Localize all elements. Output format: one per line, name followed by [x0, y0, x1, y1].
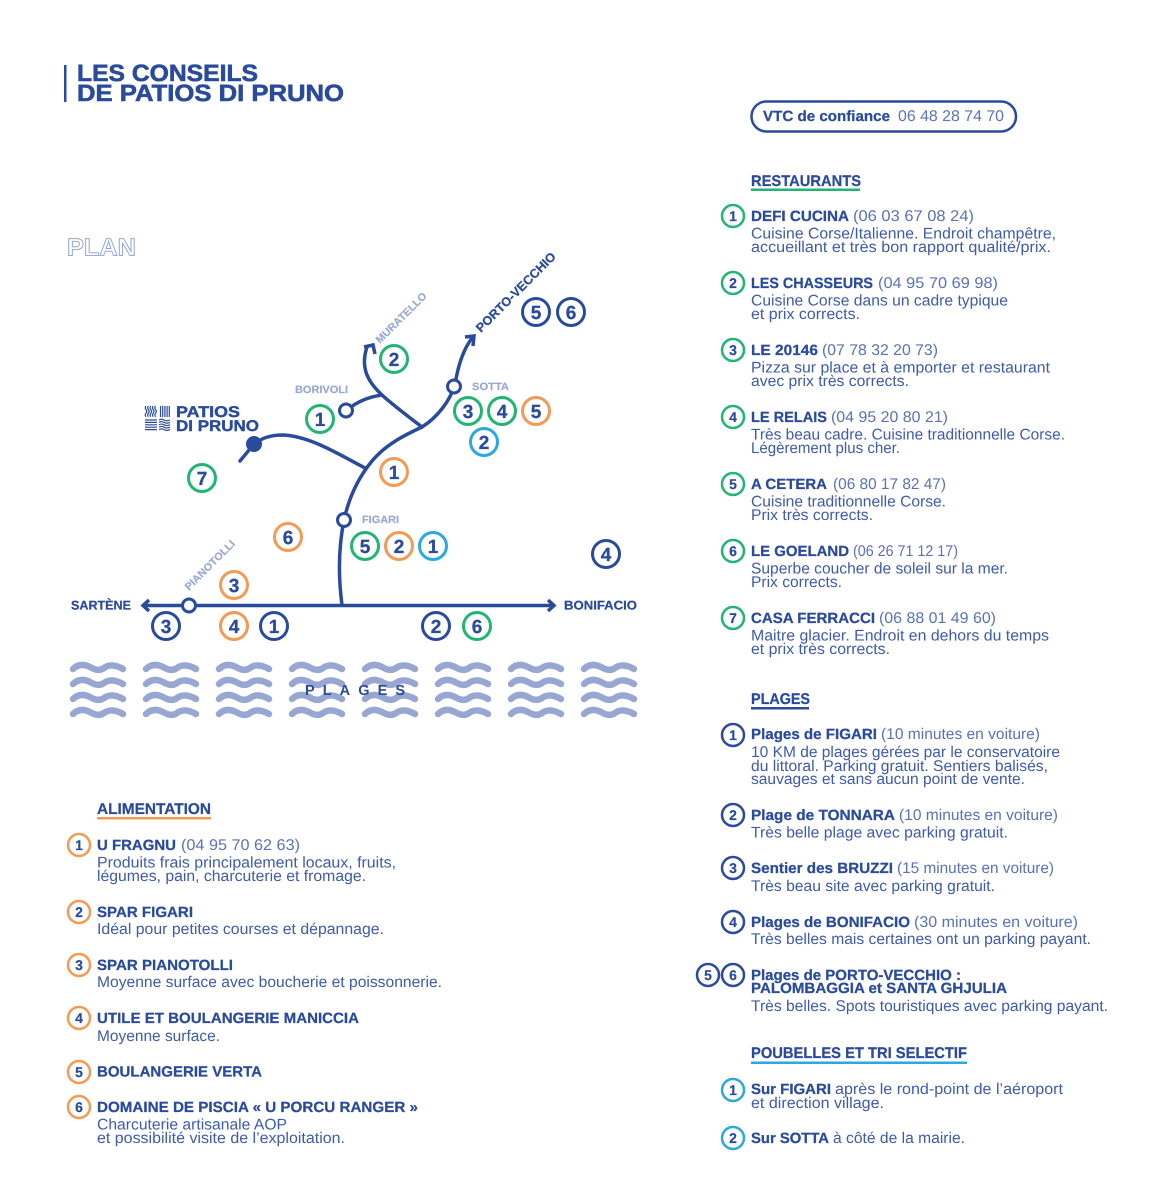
map markers: 5 — [360, 537, 371, 558]
map markers: 2 — [394, 537, 404, 558]
item: le 20146 — [722, 339, 1051, 390]
item: defi cucina: Cuisine Corse/Italienne. Endroit champêtre, — [751, 226, 1056, 242]
map markers: 5 — [531, 303, 542, 324]
map markers: 5 — [531, 402, 542, 423]
map markers: 7 — [197, 469, 207, 490]
map markers: 6 — [472, 617, 482, 638]
item: u fragnu: Produits frais principalement locaux, fruits, — [97, 854, 396, 872]
place labels: PIANOTOLLI — [183, 538, 238, 593]
item: sur sotta: 2 — [729, 1130, 737, 1146]
item: utile: 4 — [75, 1010, 83, 1026]
item: plage de tonnara: 2 — [729, 807, 737, 823]
item: le goeland: Prix corrects. — [751, 574, 842, 591]
map markers: 2 — [431, 617, 441, 638]
item: le goeland: Superbe coucher de soleil sur la mer. — [751, 560, 1008, 578]
item: plages de bonifacio: Plages de BONIFACIO — [751, 915, 910, 931]
item: spar pianotolli: 3 — [75, 957, 83, 973]
item: defi cucina: DEFI CUCINA — [751, 209, 849, 225]
item: a cetera: A CETERA — [751, 477, 827, 493]
map markers: 3 — [463, 402, 473, 423]
map markers: 4 — [229, 617, 240, 638]
item: domaine de piscia: Charcuterie artisanale AOP — [97, 1116, 287, 1134]
map markers: 2 — [389, 350, 399, 371]
place labels: SARTÈNE — [71, 598, 131, 612]
callout: vtc: 06 48 28 74 70 — [898, 108, 1004, 125]
item: les chasseurs: Cuisine Corse dans un cadre typique — [751, 292, 1008, 310]
item: defi cucina — [722, 205, 1056, 256]
item: plages de porto-vecchio: 6 — [729, 967, 737, 983]
map markers: 3 — [229, 576, 239, 597]
item: sentier des bruzzi: Sentier des BRUZZI — [751, 861, 893, 877]
item: boulangerie verta: BOULANGERIE VERTA — [97, 1064, 262, 1080]
place labels: MURATELLO — [374, 290, 429, 346]
item: sentier des bruzzi — [722, 857, 1054, 895]
title: LES CONSEILS — [77, 60, 258, 86]
item: spar figari: 2 — [75, 904, 83, 920]
item: plage de tonnara: Très belle plage avec parking gratuit. — [751, 824, 1008, 842]
item: sur sotta: Sur SOTTA — [751, 1131, 829, 1147]
heading: poubelles: POUBELLES ET TRI SELECTIF — [751, 1045, 967, 1062]
item: sentier des bruzzi: 3 — [729, 860, 737, 876]
item: spar figari: SPAR FIGARI — [97, 905, 193, 921]
item: plages de porto-vecchio: Très belles. Spots touristiques avec parking payant. — [751, 998, 1108, 1015]
map markers: 6 — [566, 303, 576, 324]
item: sur figari: et direction village. — [751, 1095, 884, 1112]
place labels: PORTO-VECCHIO — [473, 249, 559, 335]
item: u fragnu: légumes, pain, charcuterie et fromage. — [97, 868, 366, 885]
item: casa ferracci: (06 88 01 49 60) — [879, 610, 996, 627]
item: spar pianotolli: SPAR PIANOTOLLI — [97, 958, 233, 974]
item: plages de porto-vecchio — [697, 964, 1108, 1015]
place labels — [71, 249, 637, 612]
item: les chasseurs: 2 — [729, 275, 737, 291]
item: utile: UTILE ET BOULANGERIE MANICCIA — [97, 1011, 359, 1027]
item: plages de bonifacio: (30 minutes en voiture) — [914, 914, 1078, 931]
item: plages de porto-vecchio: 5 — [704, 967, 712, 983]
item: sentier des bruzzi: (15 minutes en voiture) — [897, 860, 1054, 877]
item: plages de bonifacio — [722, 911, 1091, 948]
item: plages de porto-vecchio: PALOMBAGGIA et SANTA GHJULIA — [751, 981, 1007, 997]
map markers: 1 — [269, 617, 280, 638]
panel: restaurants — [722, 173, 1065, 658]
item: le 20146: Pizza sur place et à emporter et restaurant — [751, 360, 1051, 376]
item: sur sotta — [722, 1127, 965, 1149]
item: le relais — [722, 406, 1065, 457]
item: u fragnu — [68, 834, 396, 885]
item: u fragnu: 1 — [75, 837, 83, 853]
item: a cetera — [722, 473, 946, 524]
item: casa ferracci: CASA FERRACCI — [751, 611, 875, 627]
item: sur figari: après le rond-point de l’aéroport — [835, 1081, 1064, 1098]
place labels: BORIVOLI — [295, 384, 348, 396]
callout: vtc — [752, 102, 1016, 132]
item: le 20146: 3 — [729, 342, 737, 358]
map markers: 1 — [428, 537, 439, 558]
logo: patios di pruno: DI PRUNO — [176, 418, 259, 435]
map markers: 3 — [161, 617, 171, 638]
item: plages de figari: Plages de FIGARI — [751, 727, 877, 743]
item: le 20146: (07 78 32 20 73) — [822, 342, 938, 359]
map markers: 1 — [315, 410, 326, 431]
item: plages de figari: du littoral. Parking gratuit. Sentiers balisés, — [751, 758, 1048, 775]
map markers — [152, 298, 620, 640]
item: sur sotta: à côté de la mairie. — [833, 1130, 965, 1147]
item: casa ferracci: et prix très corrects. — [751, 641, 890, 658]
map — [71, 249, 637, 715]
item: le relais: Légèrement plus cher. — [751, 440, 900, 457]
item: le relais: LE RELAIS — [751, 410, 827, 426]
item: boulangerie verta — [68, 1061, 262, 1083]
item: utile: Moyenne surface. — [97, 1028, 220, 1045]
item: sentier des bruzzi: Très beau site avec parking gratuit. — [751, 878, 995, 895]
label: plages: PLAGES — [305, 683, 405, 699]
item: les chasseurs: LES CHASSEURS — [751, 276, 873, 292]
arrowheads — [143, 336, 554, 611]
item: a cetera: Prix très corrects. — [751, 507, 873, 524]
map markers: 4 — [601, 545, 612, 566]
item: sur figari: Sur FIGARI — [751, 1082, 831, 1098]
item: plages de figari: sauvages et sans aucun point de vente. — [751, 771, 1025, 788]
item: spar figari — [68, 901, 384, 938]
item: le goeland: 6 — [729, 543, 737, 559]
item: spar pianotolli: Moyenne surface avec boucherie et poissonnerie. — [97, 974, 442, 991]
logo: patios di pruno — [145, 404, 259, 435]
map markers: 1 — [389, 463, 400, 484]
item: defi cucina: 1 — [729, 208, 737, 224]
heading: alimentation: ALIMENTATION — [97, 801, 211, 818]
item: a cetera: Cuisine traditionnelle Corse. — [751, 494, 946, 510]
item: le goeland: (06 26 71 12 17) — [853, 543, 958, 560]
item: domaine de piscia: DOMAINE DE PISCIA « U PORCU RANGER » — [97, 1100, 418, 1116]
item: u fragnu: (04 95 70 62 63) — [181, 837, 300, 854]
place labels: FIGARI — [362, 514, 399, 526]
item: a cetera: (06 80 17 82 47) — [833, 476, 946, 493]
heading: plan: PLAN — [67, 234, 136, 262]
item: domaine de piscia: et possibilité visite de l’exploitation. — [97, 1130, 345, 1147]
item: casa ferracci: 7 — [729, 610, 737, 626]
panel: poubelles — [722, 1045, 1064, 1149]
item: casa ferracci — [722, 607, 1049, 658]
place labels: SOTTA — [472, 381, 509, 393]
item: spar figari: Idéal pour petites courses et dépannage. — [97, 921, 384, 938]
item: plages de bonifacio: Très belles mais certaines ont un parking payant. — [751, 931, 1091, 948]
item: defi cucina: (06 03 67 08 24) — [853, 208, 974, 225]
item: plage de tonnara: (10 minutes en voiture) — [899, 807, 1058, 824]
item: plages de porto-vecchio: Plages de PORTO-VECCHIO : — [751, 968, 961, 984]
item: plage de tonnara: Plage de TONNARA — [751, 808, 895, 824]
item: plages de bonifacio: 4 — [729, 914, 737, 930]
item: le relais: (04 95 20 80 21) — [831, 409, 948, 426]
item: defi cucina: accueillant et très bon rapport qualité/prix. — [751, 239, 1051, 256]
item: a cetera: 5 — [729, 476, 737, 492]
item: plages de figari: 10 KM de plages gérées par le conservatoire — [751, 744, 1060, 761]
logo: patios di pruno: PATIOS — [176, 404, 240, 421]
road network — [145, 338, 552, 606]
map markers: 4 — [497, 402, 508, 423]
title — [64, 60, 344, 106]
item: spar pianotolli — [68, 954, 442, 991]
item: plages de figari — [722, 724, 1060, 788]
item: plage de tonnara — [722, 804, 1058, 842]
map markers: 6 — [283, 528, 293, 549]
item: u fragnu: U FRAGNU — [97, 838, 176, 854]
item: le 20146: LE 20146 — [751, 343, 818, 359]
item: plages de figari: (10 minutes en voiture) — [881, 726, 1040, 743]
item: les chasseurs — [722, 272, 1008, 323]
item: utile — [68, 1007, 359, 1045]
title: DE PATIOS DI PRUNO — [77, 80, 344, 106]
item: les chasseurs: et prix corrects. — [751, 306, 860, 323]
road nodes — [182, 380, 460, 612]
item: le 20146: avec prix très corrects. — [751, 373, 909, 390]
item: le relais: 4 — [729, 409, 737, 425]
item: sur figari: 1 — [729, 1082, 737, 1098]
item: plages de figari: 1 — [729, 727, 737, 743]
panel: alimentation — [68, 801, 442, 1147]
map markers: 2 — [479, 433, 489, 454]
place labels: BONIFACIO — [564, 598, 637, 612]
callout: vtc: VTC de confiance — [763, 109, 890, 125]
item: casa ferracci: Maitre glacier. Endroit en dehors du temps — [751, 628, 1049, 644]
item: le goeland — [722, 540, 1008, 591]
sea waves — [73, 665, 634, 715]
item: boulangerie verta: 5 — [75, 1064, 83, 1080]
panel: plages — [697, 691, 1108, 1015]
item: domaine de piscia: 6 — [75, 1099, 83, 1115]
heading: plages: PLAGES — [751, 691, 810, 708]
item: les chasseurs: (04 95 70 69 98) — [878, 275, 998, 292]
item: domaine de piscia — [68, 1096, 418, 1147]
item: le relais: Très beau cadre. Cuisine traditionnelle Corse. — [751, 426, 1065, 444]
item: le goeland: LE GOELAND — [751, 544, 849, 560]
item: sur figari — [722, 1079, 1064, 1112]
heading: restaurants: RESTAURANTS — [751, 173, 861, 190]
